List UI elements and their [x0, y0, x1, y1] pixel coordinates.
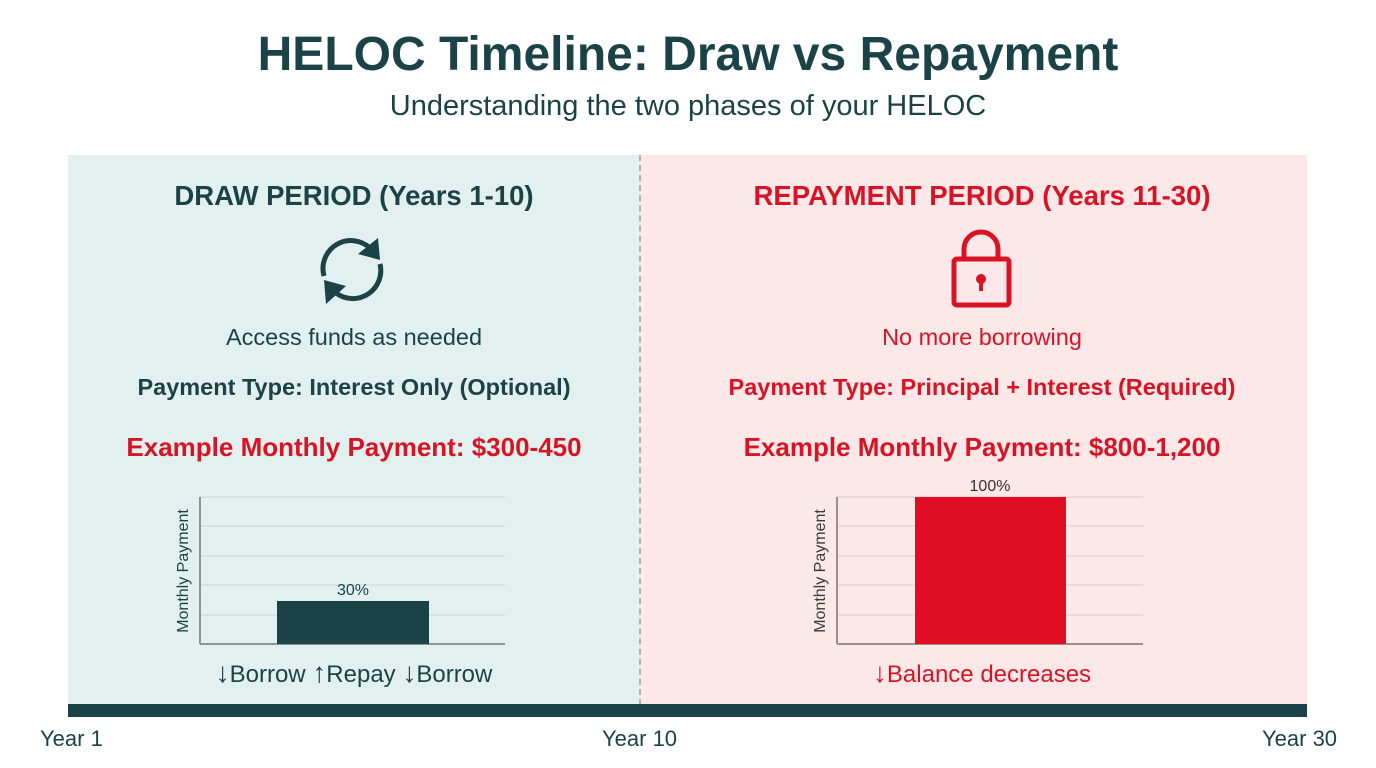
- subtitle: Understanding the two phases of your HELOC: [390, 90, 986, 122]
- text: example payment: Example Monthly Payment: $300-450: [126, 432, 582, 462]
- bar chart: draw: [175, 496, 505, 645]
- text: borrow repay borrow: ↓Borrow ↑Repay ↓Borrow: [216, 657, 492, 688]
- label: year 1: Year 1: [40, 726, 103, 751]
- panel: draw period: [68, 155, 640, 705]
- bar chart: draw: 30%: [337, 582, 369, 599]
- icon: lock: [952, 230, 1012, 308]
- text: access funds: Access funds as needed: [226, 324, 482, 350]
- text: payment type: Payment Type: Interest Only (Optional): [137, 374, 571, 400]
- title: HELOC Timeline: Draw vs Repayment: [258, 28, 1118, 81]
- bar chart: repayment: Monthly Payment: [812, 509, 829, 633]
- bar chart: repayment: 100%: [970, 478, 1010, 495]
- text: payment type: Payment Type: Principal + Interest (Required): [729, 374, 1235, 400]
- label: year 10: Year 10: [602, 726, 677, 751]
- timeline bar: [68, 704, 1307, 717]
- panel: repayment period: [640, 155, 1307, 705]
- text: balance decreases: ↓Balance decreases: [873, 657, 1091, 688]
- bar chart: repayment: [812, 478, 1143, 645]
- label: year 30: Year 30: [1262, 726, 1337, 751]
- bar chart: draw: Monthly Payment: [175, 509, 192, 633]
- heading: repayment: REPAYMENT PERIOD (Years 11-30): [754, 180, 1210, 211]
- heading: draw: DRAW PERIOD (Years 1-10): [174, 180, 534, 211]
- text: no more borrowing: No more borrowing: [882, 324, 1082, 350]
- text: example payment: Example Monthly Payment: $800-1,200: [744, 432, 1220, 462]
- icon: refresh: [320, 238, 384, 304]
- divider dashed: [639, 155, 641, 705]
